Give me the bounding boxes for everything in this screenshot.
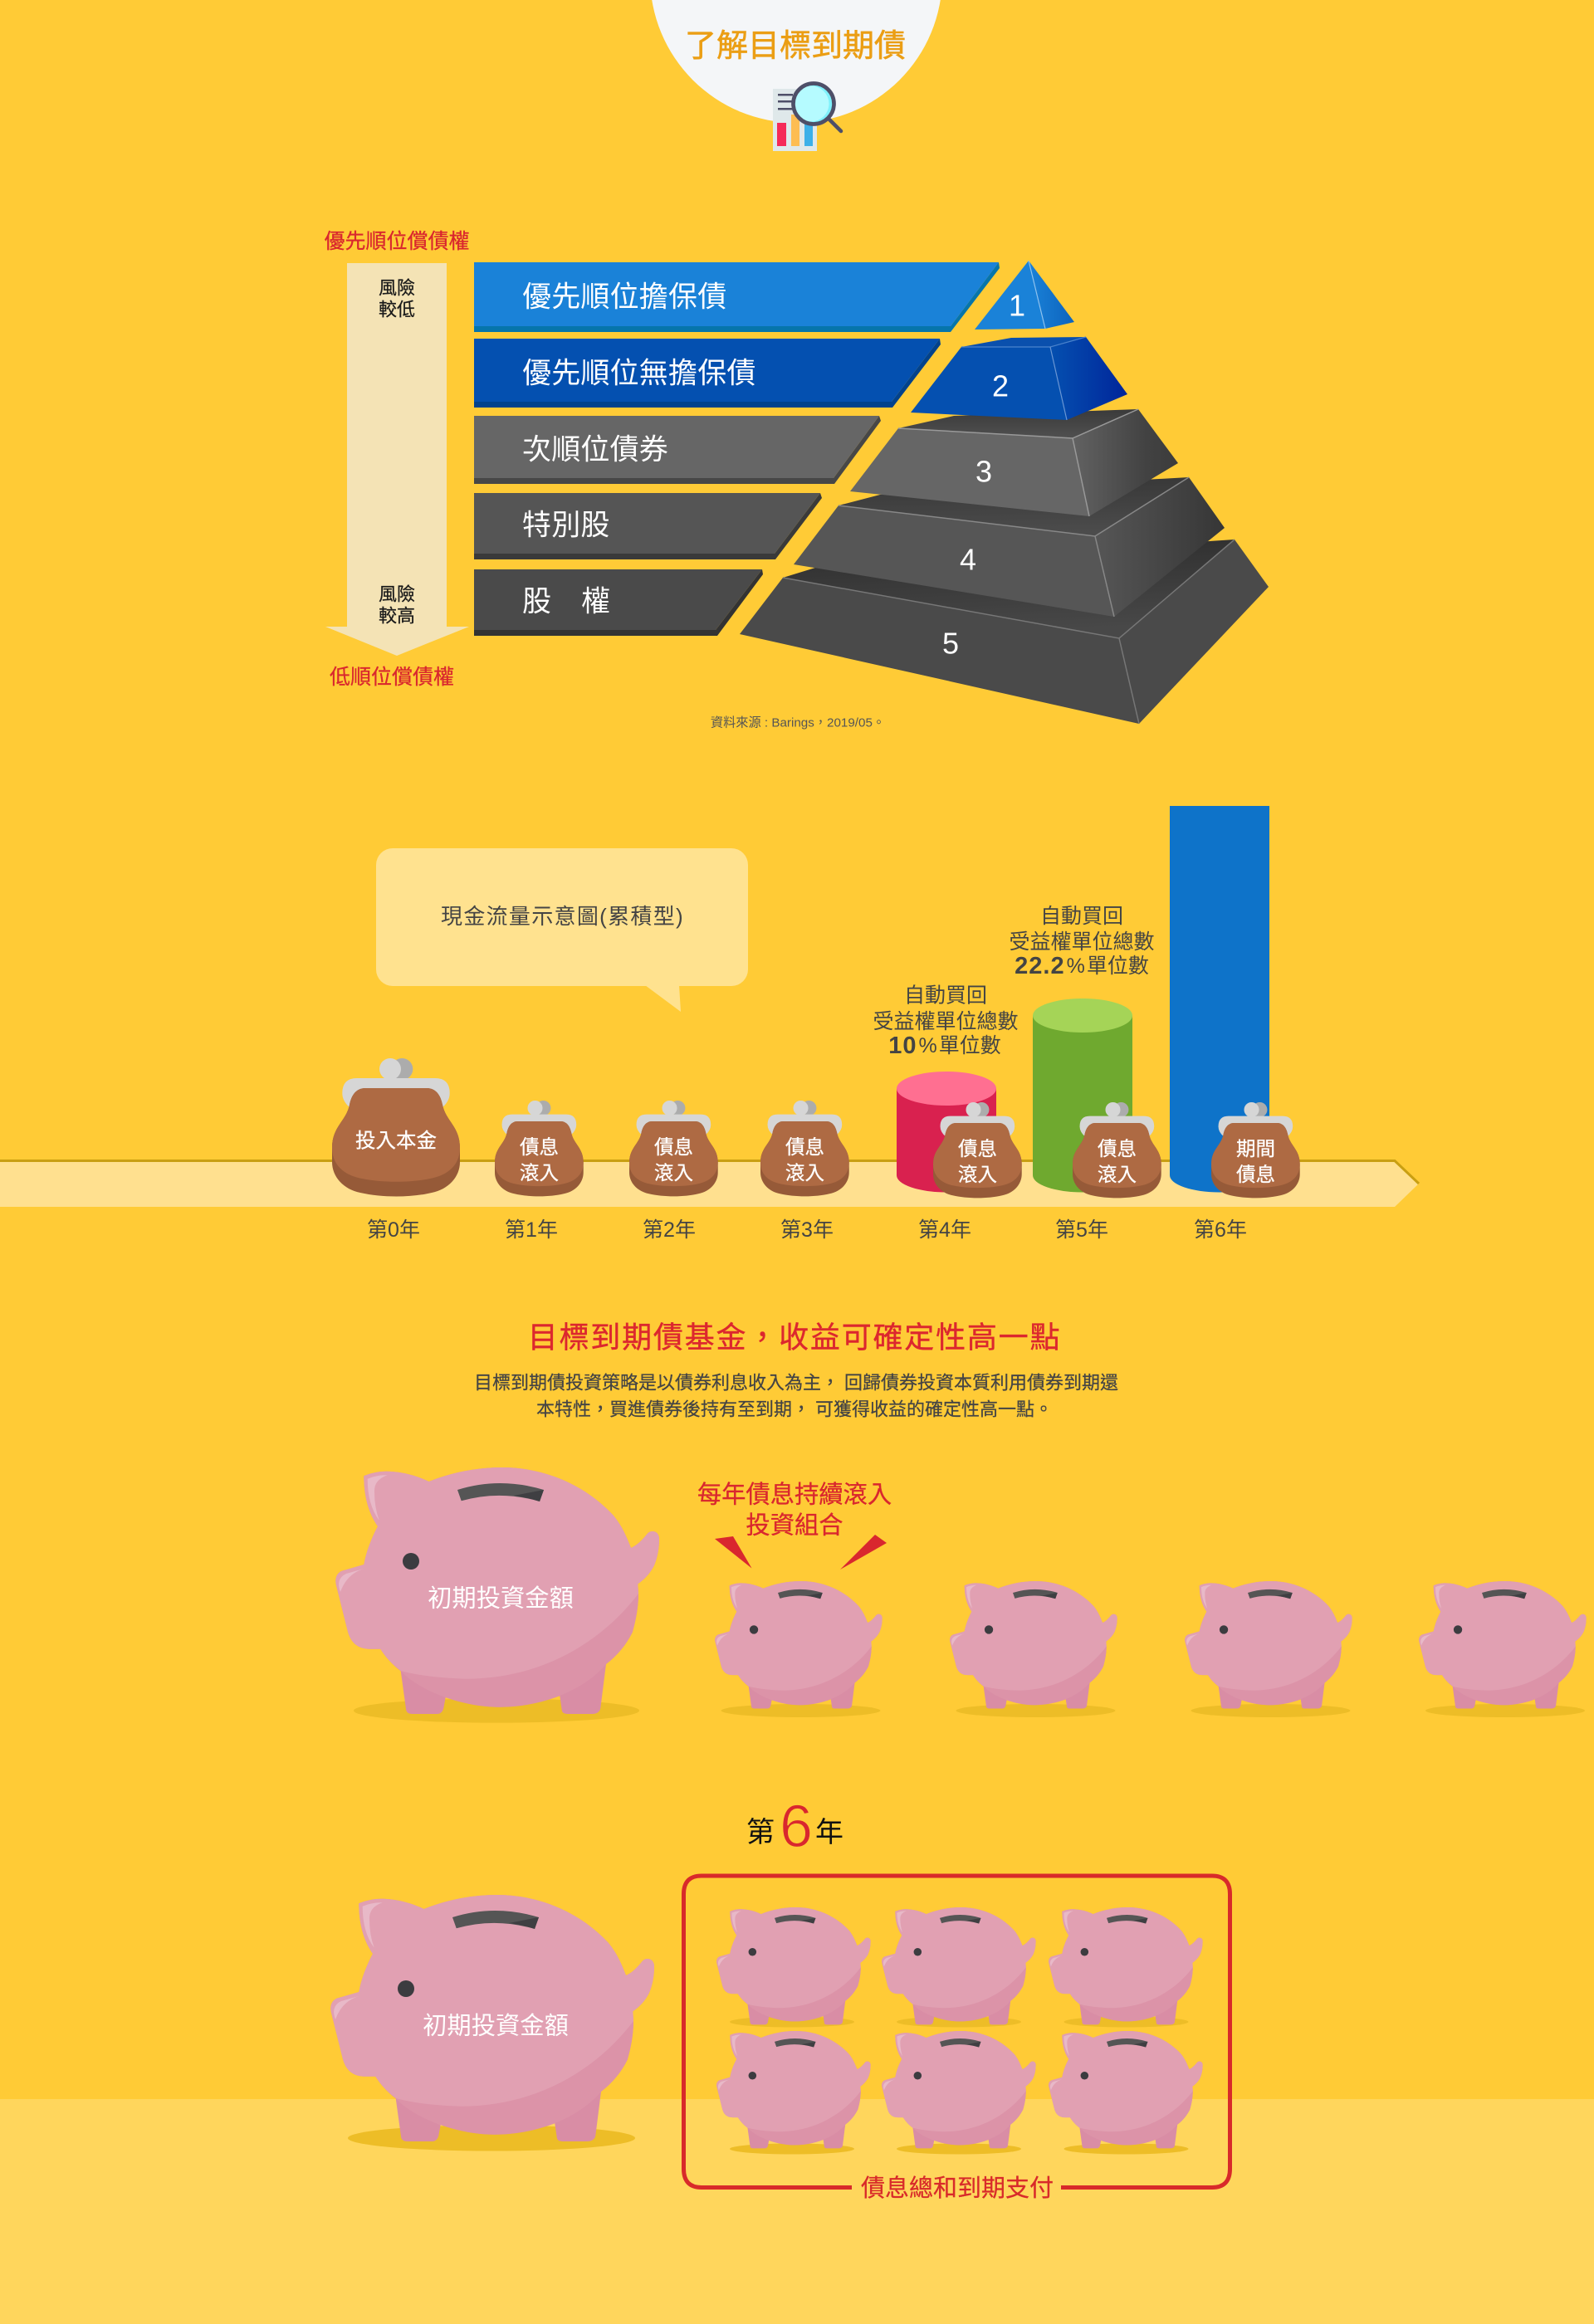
- layer 1: [975, 261, 1074, 330]
- pig: frame row 2 col 2: [882, 2031, 1036, 2155]
- callout: cash flow diagram: 現金流量示意圖(累積型): [441, 904, 684, 929]
- text block: description: [474, 1373, 1118, 1419]
- text: lower risk line 2: 較低: [379, 299, 415, 320]
- text: year 5 buyback note: 22.2%單位數: [1015, 953, 1149, 979]
- bar: preferred: 特別股: [522, 510, 610, 541]
- text: higher risk line 2: 較高: [379, 606, 415, 626]
- purse: year 6: [1211, 1102, 1300, 1198]
- callout: cash flow diagram: [376, 848, 748, 1012]
- heading: year 6: [746, 1794, 843, 1860]
- bar: senior secured: [474, 262, 1000, 332]
- year axis labels: 第5年: [1055, 1218, 1108, 1242]
- text: year 5 buyback note: [1009, 905, 1155, 979]
- text: year 5 buyback note: 受益權單位總數: [1009, 930, 1155, 954]
- bar: equity: [474, 569, 763, 636]
- purse: year 4: 債息: [958, 1138, 997, 1160]
- pig: row pig 1: [715, 1581, 883, 1717]
- bar: senior secured: 優先順位擔保債: [522, 281, 726, 314]
- panel: total interest frame: [684, 1876, 1230, 2202]
- text: lower risk: 風險: [379, 277, 415, 299]
- pig: frame row 1 col 1: [716, 1907, 871, 2027]
- layer 5: [740, 540, 1269, 724]
- bar: subordinated: [474, 416, 881, 484]
- callout: yearly interest reinvested: 每年債息持續滾入: [697, 1481, 892, 1509]
- layer 4: [794, 477, 1225, 617]
- bar: equity: 股 權: [522, 586, 611, 618]
- chart: red cylinder year 4: [897, 1072, 996, 1192]
- purse: principal: 投入本金: [355, 1129, 437, 1152]
- header: title circle: [650, 0, 942, 123]
- layer 4: 4: [960, 543, 976, 576]
- heading: year 6: 年: [815, 1817, 843, 1848]
- text: year 5 buyback note: 自動買回: [1040, 905, 1123, 928]
- pig: initial investment (bottom): 初期投資金額: [423, 2012, 569, 2040]
- chart: green cylinder year 5: [1033, 998, 1132, 1192]
- bar: senior unsecured: [474, 339, 941, 408]
- year axis labels: 第2年: [643, 1218, 696, 1242]
- purse: year 2: 滾入: [654, 1162, 693, 1184]
- heading: year 6: 第: [746, 1817, 775, 1848]
- layer 2: [911, 337, 1127, 420]
- layer 3: [850, 409, 1178, 516]
- source note: 資料來源 : Barings，2019/05。: [711, 715, 885, 730]
- pig: initial investment (top): 初期投資金額: [428, 1585, 574, 1612]
- purse: year 3: [760, 1101, 849, 1196]
- lower background band: [0, 2099, 1594, 2324]
- pig: frame row 1 col 3: [1049, 1907, 1203, 2027]
- layer 3: 3: [975, 455, 992, 488]
- pig: initial investment (top): [335, 1467, 659, 1723]
- purse: year 1: 債息: [520, 1136, 559, 1158]
- purse: year 5: [1073, 1102, 1161, 1198]
- bar: senior unsecured: 優先順位無擔保債: [522, 357, 756, 390]
- year axis labels: 第3年: [780, 1218, 834, 1242]
- purse: year 4: 滾入: [958, 1164, 997, 1185]
- arrow: risk direction: [325, 263, 469, 656]
- pig: row pig 4: [1419, 1581, 1587, 1717]
- layer 2: 2: [992, 369, 1009, 403]
- chart: blue bar year 6: [1170, 806, 1269, 1192]
- year axis labels: 第6年: [1194, 1218, 1247, 1242]
- text: year 4 buyback note: 自動買回: [904, 984, 987, 1008]
- purse: year 3: 債息: [785, 1136, 824, 1158]
- text block: description: 本特性，買進債券後持有至到期， 可獲得收益的確定性高一點。: [536, 1399, 1053, 1419]
- text: year 4 buyback note: [873, 984, 1019, 1059]
- pig: frame row 2 col 3: [1049, 2031, 1203, 2155]
- purse: year 5: 滾入: [1098, 1164, 1137, 1185]
- purse: year 2: [629, 1101, 718, 1196]
- text: interest paid at maturity: 債息總和到期支付: [861, 2175, 1054, 2202]
- layer 5: 5: [942, 626, 959, 661]
- purse: year 6: 期間: [1236, 1138, 1275, 1160]
- heading: target maturity fund: 目標到期債基金，收益可確定性高一點: [528, 1320, 1061, 1355]
- bar: preferred: [474, 493, 822, 559]
- text: higher risk: 風險: [379, 584, 415, 604]
- purse: year 6: 債息: [1236, 1164, 1275, 1185]
- heading: year 6: 6: [780, 1794, 813, 1860]
- purse: year 5: 債息: [1098, 1138, 1137, 1160]
- layer 1: 1: [1009, 289, 1025, 322]
- label: junior priority: 低順位償債權: [330, 666, 454, 689]
- chart: pyramid: [740, 261, 1269, 724]
- purse: year 3: 滾入: [785, 1162, 824, 1184]
- pig: row pig 2: [950, 1581, 1117, 1717]
- purse: year 1: 滾入: [520, 1162, 559, 1184]
- purse: principal: [332, 1058, 460, 1197]
- year axis labels: 第0年: [367, 1218, 420, 1242]
- year axis labels: [367, 1218, 1247, 1242]
- pig: frame row 1 col 2: [882, 1907, 1036, 2027]
- callout: yearly interest reinvested: 投資組合: [746, 1512, 843, 1539]
- icon: document chart with magnifier: [773, 83, 841, 151]
- label: senior priority: 優先順位償債權: [324, 230, 470, 253]
- title: 了解目標到期債: [685, 29, 906, 64]
- year axis labels: 第1年: [505, 1218, 558, 1242]
- text block: description: 目標到期債投資策略是以債券利息收入為主， 回歸債券投資本質利用債券到期還: [474, 1373, 1118, 1393]
- pig: frame row 2 col 1: [716, 2031, 871, 2155]
- timeline band: [0, 1160, 1419, 1207]
- pig: row pig 3: [1185, 1581, 1352, 1717]
- pig: initial investment (bottom): [330, 1895, 654, 2151]
- text: year 4 buyback note: 10%單位數: [888, 1033, 1001, 1059]
- text: year 4 buyback note: 受益權單位總數: [873, 1010, 1019, 1033]
- purse: year 1: [495, 1101, 584, 1196]
- purse: year 4: [933, 1102, 1022, 1198]
- bar: subordinated: 次順位債券: [522, 433, 668, 466]
- purse: year 2: 債息: [654, 1136, 693, 1158]
- callout: yearly interest reinvested: [697, 1481, 892, 1570]
- year axis labels: 第4年: [918, 1218, 971, 1242]
